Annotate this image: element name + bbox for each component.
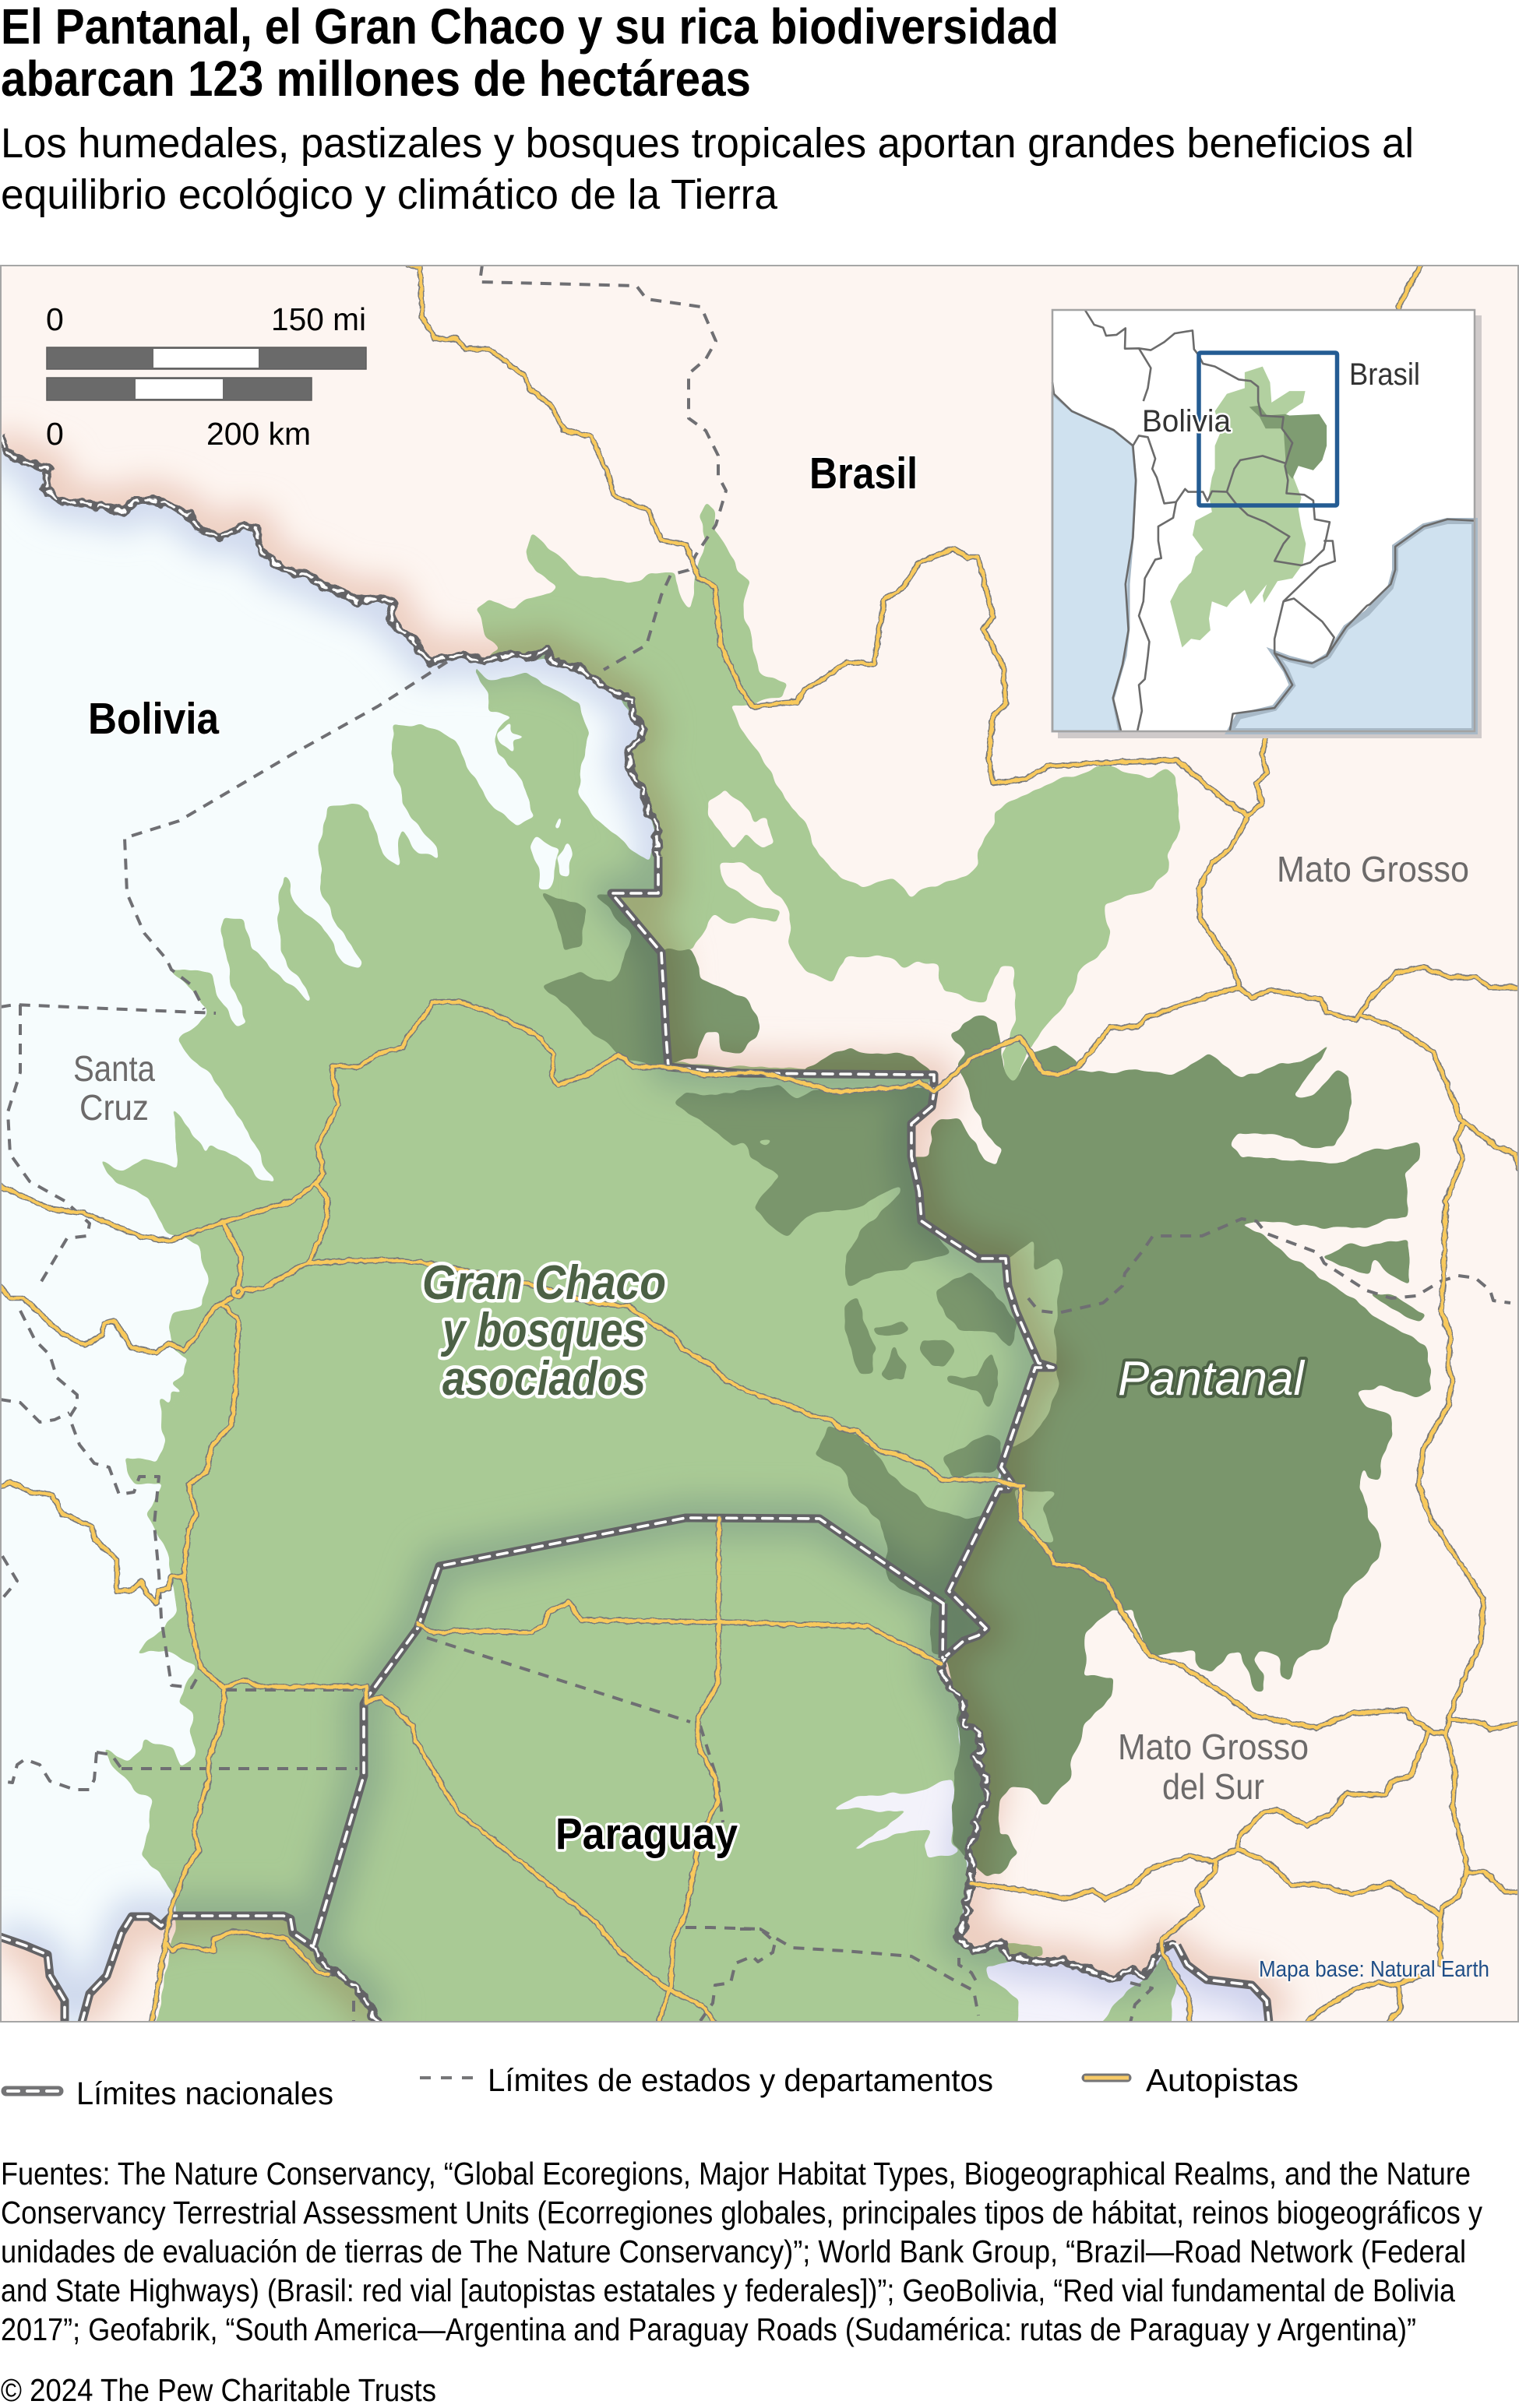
national borders <box>0 436 1269 2023</box>
region: Bolivia and Paraguay land <box>2 448 1264 2021</box>
scale bar: 0 <box>46 416 64 452</box>
subtitle: Los humedales, pastizales y bosques tropicales aportan grandes beneficios al <box>1 120 1414 167</box>
label: Pantanal: Pantanal <box>1118 1352 1306 1406</box>
shading along national borders <box>0 436 1269 2023</box>
region: Pantanal (dark green) <box>914 1017 1431 1876</box>
region: dark forest patches in Bolivia and Paraguay <box>541 890 1018 1658</box>
legend: state and department boundaries: Límites de estados y departamentos <box>488 2062 993 2098</box>
label: Gran Chaco y bosques asociados: y bosques <box>440 1304 646 1357</box>
label: Mato Grosso del Sur: Mato Grosso <box>1118 1727 1309 1767</box>
legend: national borders: Límites nacionales <box>76 2075 333 2111</box>
sources <box>1 2156 1482 2347</box>
label: Mato Grosso del Sur <box>1118 1727 1309 1807</box>
legend <box>6 2062 1299 2111</box>
country and state labels <box>73 449 1489 1982</box>
legend: highways: Autopistas <box>1146 2062 1299 2098</box>
highways <box>0 265 1519 2023</box>
label: Gran Chaco y bosques asociados: asociados <box>442 1352 646 1406</box>
state and department boundaries <box>0 265 1510 2023</box>
map panel <box>0 265 1519 2048</box>
label: Gran Chaco y bosques asociados: Gran Chaco <box>422 1256 666 1310</box>
label: Santa Cruz: Cruz <box>79 1087 149 1128</box>
region: Gran Chaco and associated forests (light green) <box>97 501 1180 2048</box>
title <box>1 0 1059 107</box>
subtitle: equilibrio ecológico y climático de la Tierra <box>1 171 778 218</box>
title: El Pantanal, el Gran Chaco y su rica biodiversidad <box>1 0 1059 55</box>
credit: base map: Mapa base: Natural Earth <box>1259 1957 1489 1982</box>
subtitle <box>1 120 1414 218</box>
label: Gran Chaco y bosques asociados <box>422 1256 666 1406</box>
label: Mato Grosso: Mato Grosso <box>1277 849 1469 889</box>
title: abarcan 123 millones de hectáreas <box>1 51 751 107</box>
inset label: Brasil: Brasil <box>1349 357 1420 392</box>
map border <box>1 266 1518 2022</box>
label: Brasil: Brasil <box>809 449 918 498</box>
label: Santa Cruz <box>73 1048 155 1128</box>
scale bar <box>46 301 366 452</box>
scale bar: 150 mi <box>271 301 366 337</box>
inset locator map <box>1052 310 1482 738</box>
label: Paraguay: Paraguay <box>555 1809 738 1859</box>
scale bar: 200 km <box>206 416 311 452</box>
holes: non-forest areas inside the green region <box>472 654 959 1858</box>
region: lighter green strips beside the border <box>1009 1241 1063 1544</box>
label: Bolivia: Bolivia <box>88 694 220 744</box>
label: Santa Cruz: Santa <box>73 1048 155 1089</box>
scale bar: 0 <box>46 301 64 337</box>
inset extent box <box>1199 353 1337 505</box>
copyright: © 2024 The Pew Charitable Trusts <box>1 2372 436 2408</box>
inset label: Bolivia: Bolivia <box>1142 404 1232 438</box>
label: Mato Grosso del Sur: del Sur <box>1162 1766 1264 1807</box>
